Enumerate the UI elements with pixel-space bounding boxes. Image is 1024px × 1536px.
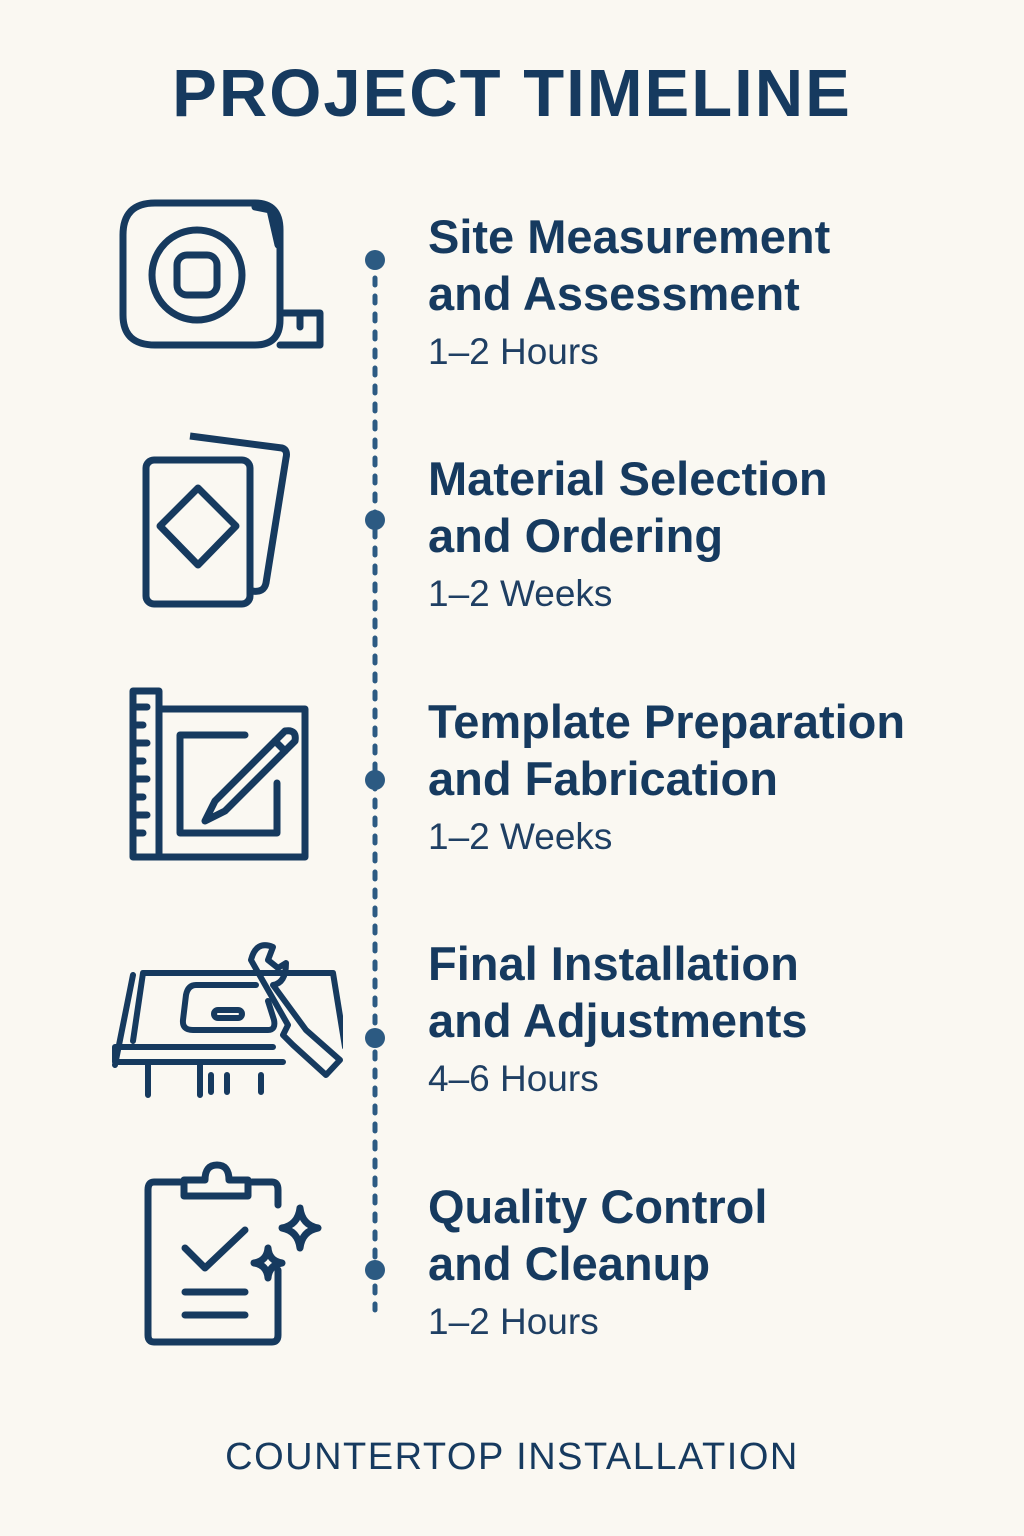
icon: template drawing — [130, 688, 308, 860]
icon: installation — [112, 942, 343, 1098]
footer: COUNTERTOP INSTALLATION — [225, 1436, 799, 1478]
step 4: 4–6 Hours — [428, 1058, 599, 1099]
step 3: 1–2 Weeks — [428, 816, 612, 857]
step 5: Quality Control — [428, 1180, 767, 1233]
icon: material samples — [142, 432, 290, 608]
icon: tape measure — [120, 200, 324, 348]
step 5: 1–2 Hours — [428, 1301, 599, 1342]
step 5 — [428, 1180, 767, 1342]
step 3 — [428, 695, 905, 857]
step 1 — [428, 210, 830, 372]
step 1: and Assessment — [428, 267, 800, 320]
step 3: and Fabrication — [428, 752, 778, 805]
step 2: 1–2 Weeks — [428, 573, 612, 614]
step 3: Template Preparation — [428, 695, 905, 748]
step 4 — [428, 937, 808, 1099]
step 2: Material Selection — [428, 452, 828, 505]
icon: clipboard — [144, 1162, 322, 1346]
step 4: and Adjustments — [428, 994, 808, 1047]
step 2 — [428, 452, 828, 614]
step 4: Final Installation — [428, 937, 799, 990]
step 1: Site Measurement — [428, 210, 830, 263]
title: PROJECT TIMELINE — [172, 56, 852, 131]
step 2: and Ordering — [428, 509, 723, 562]
step 5: and Cleanup — [428, 1237, 710, 1290]
step 1: 1–2 Hours — [428, 331, 599, 372]
timeline line with dots — [365, 250, 385, 1312]
